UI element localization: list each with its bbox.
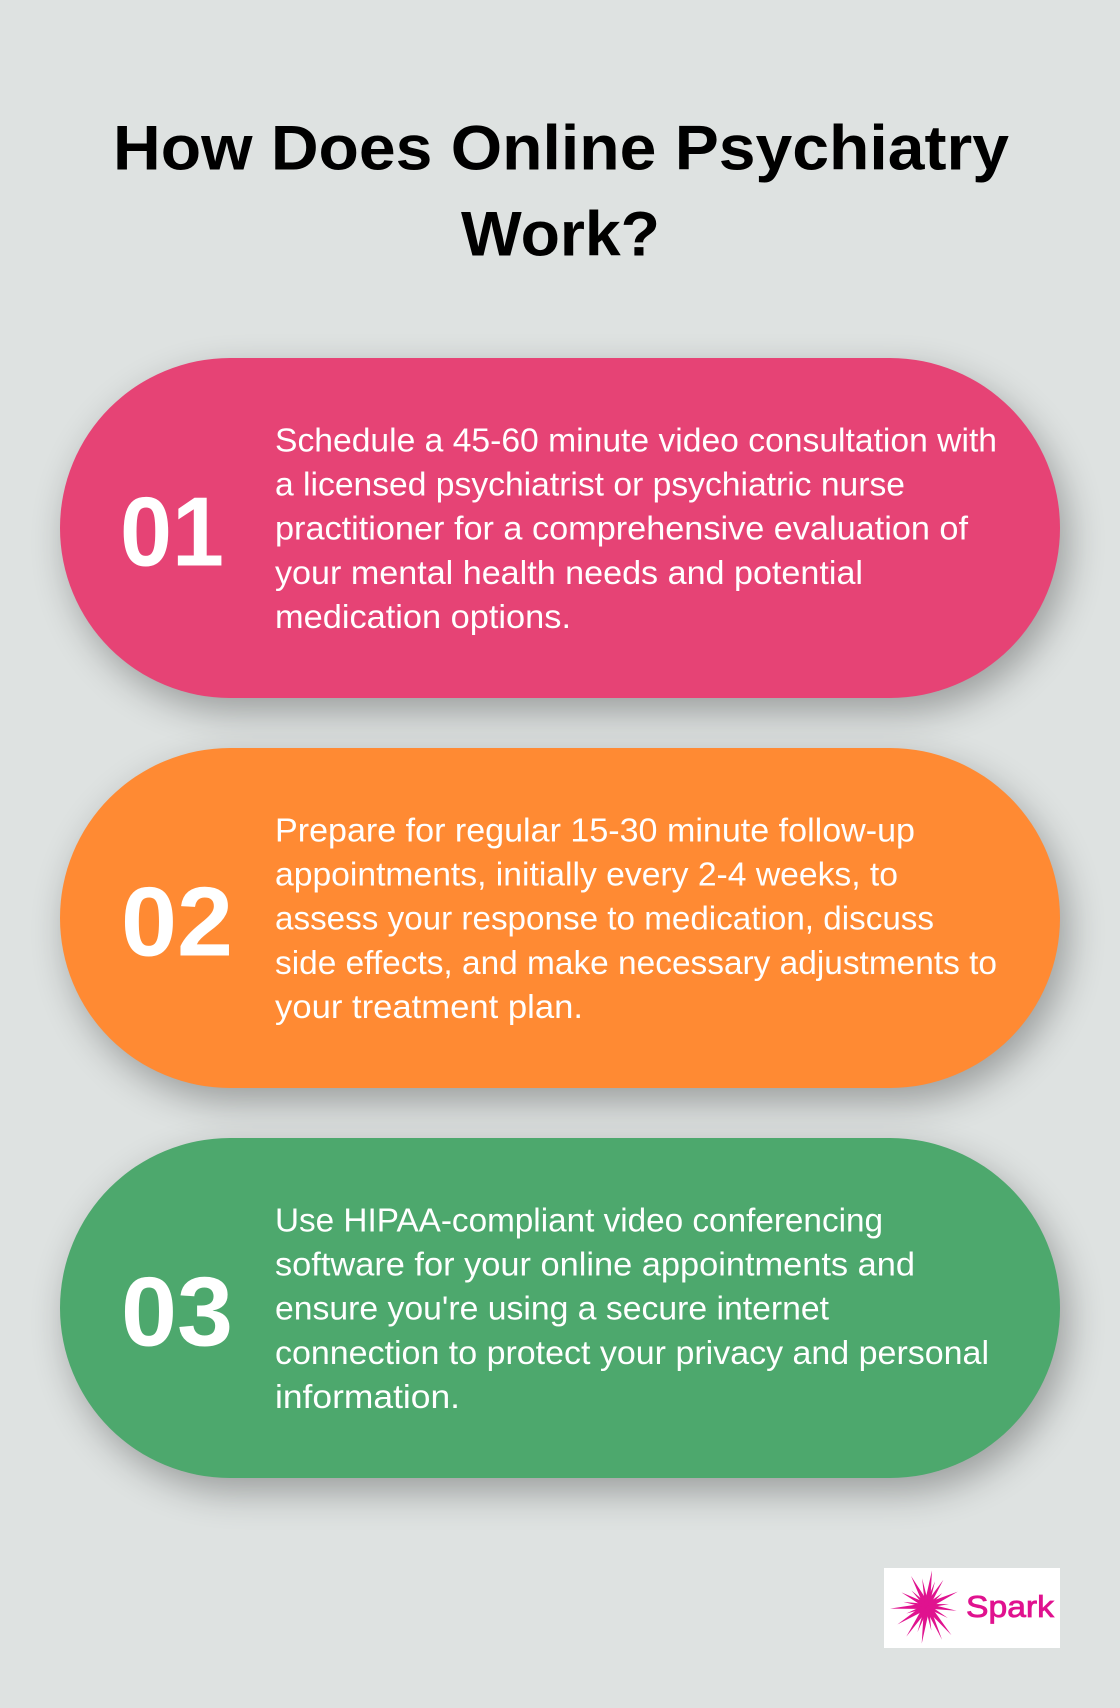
text block: step 03 description: connection to protect your privacy and personal [275, 1335, 989, 1372]
text block: step 03 description [275, 1202, 989, 1416]
text block: step 03 description: ensure you're using a secure internet [275, 1291, 830, 1328]
text block: step 02 description: side effects, and make necessary adjustments to [275, 945, 997, 982]
text block: step 01 description [275, 422, 997, 636]
logo wordmark: Spark [966, 1589, 1055, 1624]
text block: step 02 description: assess your response to medication, discuss [275, 901, 934, 938]
text block: step 03 description: Use HIPAA-compliant video conferencing [275, 1202, 883, 1240]
panel: step 01 [60, 358, 1060, 698]
panel: step 03 [60, 1138, 1060, 1478]
text block: step 01 description: your mental health needs and potential [275, 555, 863, 592]
text block: step 02 description: appointments, initially every 2-4 weeks, to [275, 857, 898, 894]
step number 01: 01 [120, 476, 224, 586]
step number 03: 03 [121, 1256, 233, 1366]
panel: step 02 [60, 748, 1060, 1088]
step number 02: 02 [121, 866, 233, 976]
text block: step 03 description: software for your online appointments and [275, 1247, 915, 1284]
title: Work? [461, 200, 660, 270]
icon: starburst [890, 1570, 959, 1644]
text block: step 01 description: practitioner for a comprehensive evaluation of [275, 511, 969, 548]
text block: step 01 description: Schedule a 45-60 minute video consultation with [275, 422, 997, 460]
title [113, 114, 1009, 270]
text block: step 02 description: your treatment plan. [275, 989, 583, 1026]
text block: step 01 description: a licensed psychiatrist or psychiatric nurse [275, 467, 905, 504]
logo: Spark [884, 1568, 1060, 1648]
text block: step 03 description: information. [275, 1379, 460, 1416]
title: How Does Online Psychiatry [113, 114, 1009, 184]
text block: step 01 description: medication options. [275, 599, 571, 636]
text block: step 02 description [275, 812, 997, 1026]
text block: step 02 description: Prepare for regular 15-30 minute follow-up [275, 812, 915, 850]
